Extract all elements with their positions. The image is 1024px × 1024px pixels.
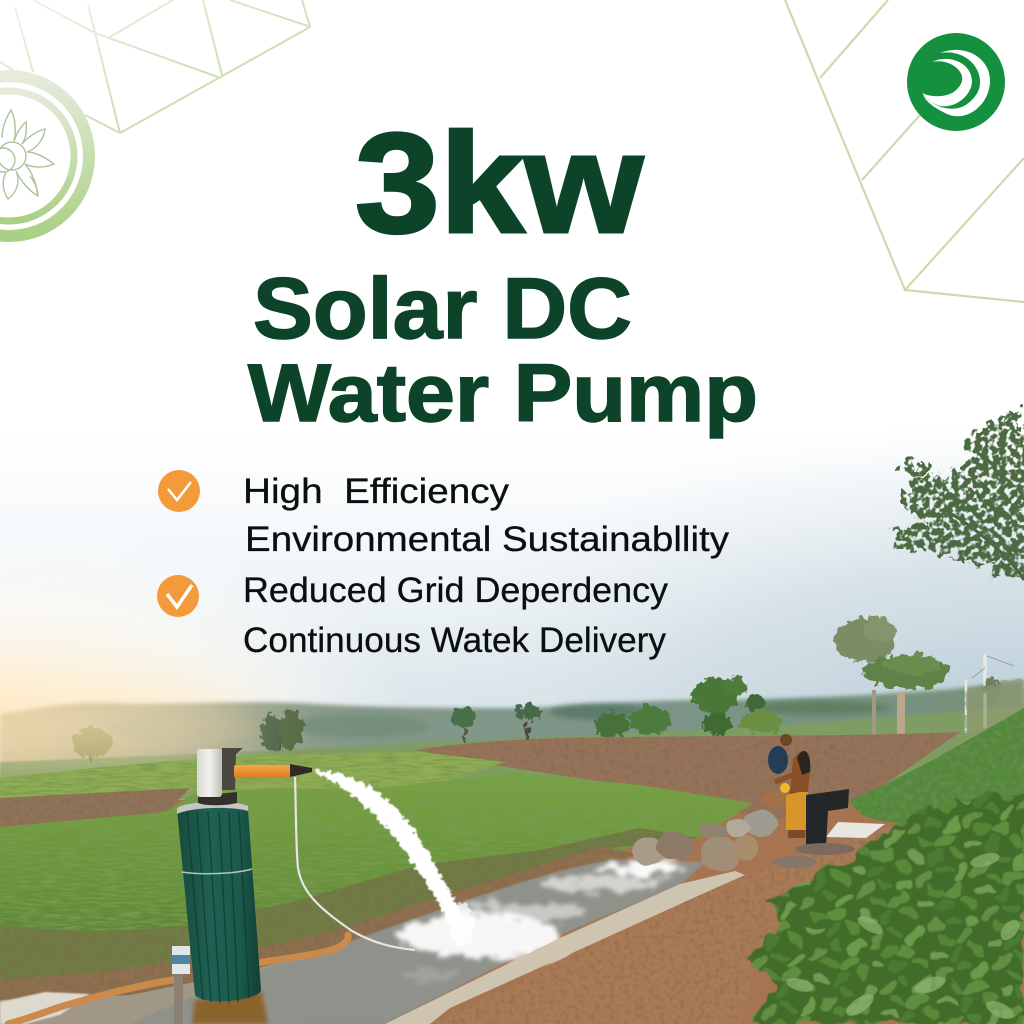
cable xyxy=(295,777,415,950)
puddle under pump xyxy=(192,992,268,1024)
ground base xyxy=(0,800,1024,1024)
cylinder band xyxy=(182,869,252,874)
flower outline xyxy=(0,110,54,199)
check icon 2 xyxy=(157,575,199,617)
rocks xyxy=(632,791,788,872)
orange pipe xyxy=(234,765,291,778)
title xyxy=(248,104,758,439)
water channel xyxy=(130,860,705,1024)
decor: top-right geometric lines xyxy=(785,0,1024,302)
warm haze left xyxy=(0,691,260,759)
decor: left circular flower emblem xyxy=(0,76,89,236)
title line: Solar DC: Solar DC xyxy=(253,261,632,357)
outer ring xyxy=(0,76,89,236)
water foam xyxy=(398,861,684,981)
tree group mid xyxy=(73,618,1024,760)
logo disc xyxy=(907,33,1005,131)
logo xyxy=(907,33,1005,131)
nozzle xyxy=(290,764,312,777)
benefits list xyxy=(157,470,730,660)
logo inner crescent xyxy=(922,59,972,106)
top-right tree xyxy=(891,411,1024,583)
control box xyxy=(773,789,855,868)
foreground leafy plants xyxy=(745,790,1024,1024)
soil field xyxy=(415,732,960,822)
far meadow xyxy=(0,705,1024,800)
tree: dark pair xyxy=(261,710,303,752)
muddy bank xyxy=(0,846,640,1024)
tree: tall acacia pair xyxy=(834,618,949,737)
tree: small center xyxy=(452,708,476,742)
marker post with label xyxy=(172,946,190,1024)
highlight leaves xyxy=(785,850,1023,1023)
item: Environmental Sustainabllity: Environmental Sustainabllity xyxy=(245,520,730,559)
tree: far left xyxy=(73,727,111,760)
bottom-left wet ground xyxy=(0,945,350,1024)
distant hills xyxy=(0,680,1024,790)
meadow band light xyxy=(0,752,505,800)
bare soil left xyxy=(0,788,190,827)
check icon 1 xyxy=(158,470,200,512)
title line: 3kw: 3kw xyxy=(355,104,644,263)
water splash xyxy=(450,903,474,947)
decor: top-left geometric lines xyxy=(0,0,310,133)
pump head base xyxy=(198,792,237,805)
right hillside xyxy=(850,708,1024,900)
distant tree line xyxy=(106,701,890,742)
cylinder ribs xyxy=(187,812,249,1003)
item: Continuous Watek Delivery: Continuous Watek Delivery xyxy=(243,621,666,660)
orange hose xyxy=(8,935,348,1024)
far right trees xyxy=(965,676,1024,735)
person xyxy=(768,734,810,838)
inner ring xyxy=(0,91,74,221)
head fittings xyxy=(222,748,243,790)
utility poles xyxy=(966,654,1014,733)
concrete curb xyxy=(385,871,745,1024)
pump cylinder body xyxy=(177,805,261,1001)
item: Reduced Grid Deperdency: Reduced Grid Deperdency xyxy=(243,571,669,610)
wet patches xyxy=(0,992,90,1024)
grass lower bank xyxy=(0,828,700,995)
title line: Water Pump: Water Pump xyxy=(248,348,758,439)
bushes xyxy=(594,706,784,737)
item: High Efficiency: High Efficiency xyxy=(243,472,510,511)
logo outer crescent xyxy=(923,50,990,116)
tree: small center 2 xyxy=(515,704,541,740)
solar pump unit xyxy=(177,748,312,1003)
water jet xyxy=(314,770,470,930)
white pump head xyxy=(197,749,222,797)
tree: round green xyxy=(691,677,766,736)
dirt path xyxy=(430,825,895,1024)
white slab xyxy=(826,822,885,838)
cylinder lid xyxy=(177,802,248,814)
main grass field xyxy=(0,773,753,965)
